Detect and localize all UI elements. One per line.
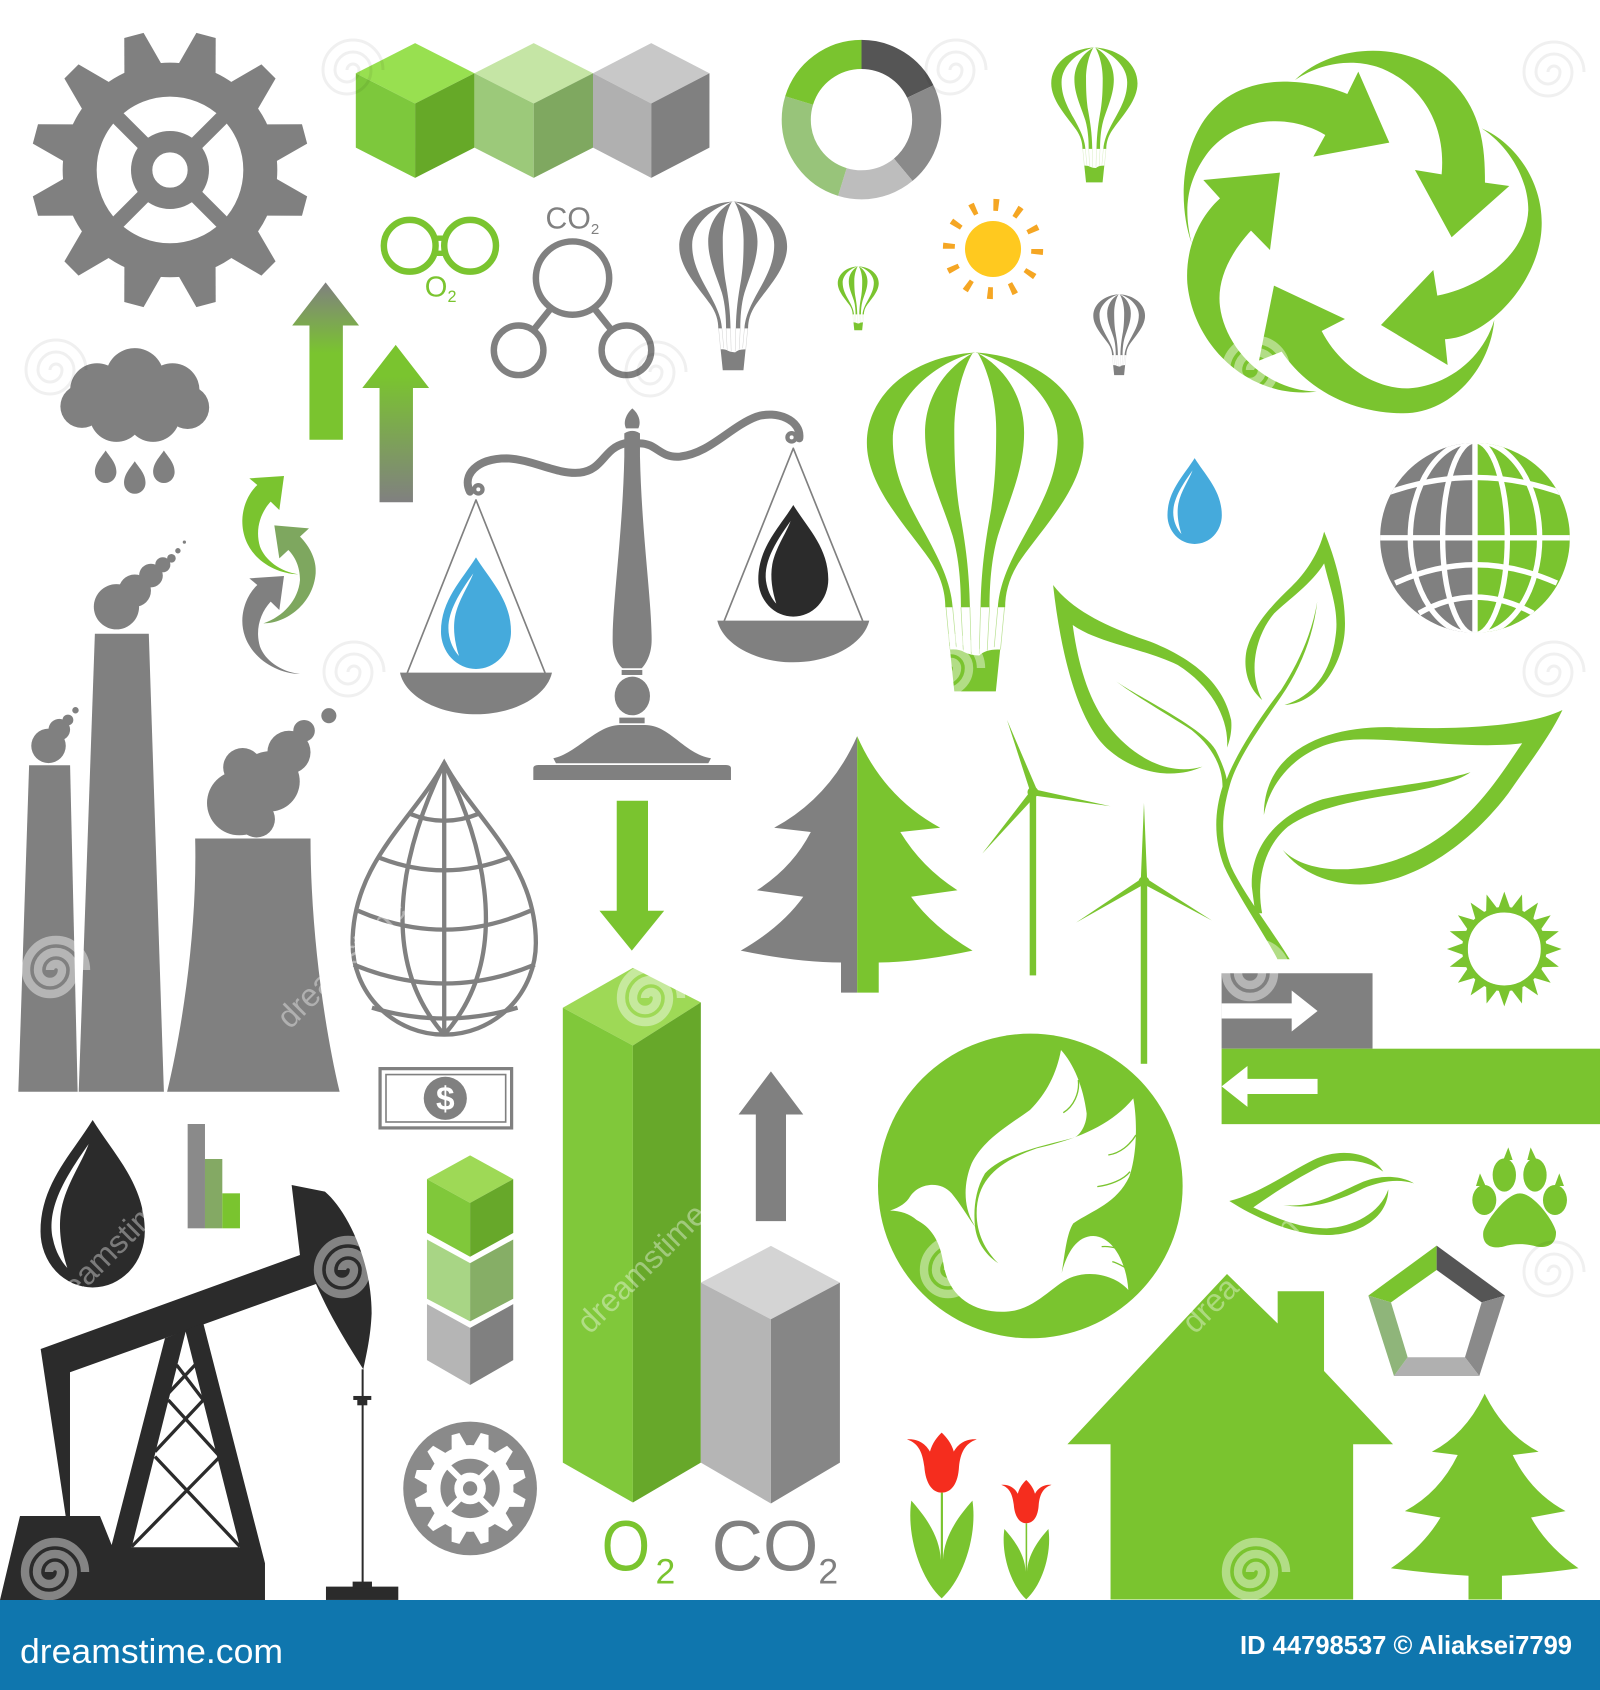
icon: CO2 molecule (494, 202, 651, 375)
icon: sun (949, 205, 1037, 293)
label: O2: 2 (656, 1551, 675, 1591)
icon: oxygen molecule (384, 220, 496, 306)
icon: oil pumpjack (0, 1185, 398, 1600)
icon: three isometric cubes (356, 43, 709, 178)
label: CO2: CO (712, 1507, 818, 1586)
watermark spirals and text: dreamstime (569, 1196, 713, 1340)
icon: CO2 molecule: CO (546, 202, 591, 235)
watermark spirals and text: dreamstime (269, 891, 413, 1035)
icon: balloon small green (838, 266, 879, 330)
icon: swirl arrows (242, 476, 316, 674)
icon: large gear (30, 30, 310, 310)
label: O2: O (602, 1507, 650, 1586)
icon: oxygen molecule: O (425, 271, 447, 303)
icon: balloon small gray (1093, 294, 1145, 375)
icon: dollar bill (380, 1069, 512, 1128)
chart: stacked isometric column (427, 1155, 513, 1385)
icon: half gray half green fir tree (741, 736, 973, 993)
icon: large red tulip (907, 1433, 977, 1598)
icon: blue water drop (1167, 458, 1222, 544)
icon: balance scale with water and oil (400, 408, 869, 780)
icon: plant with leaves (1053, 532, 1562, 959)
icon: dove in green circle (878, 1034, 1183, 1338)
icon: balloon top green (1051, 47, 1138, 182)
icon: blue water drop on scale (441, 557, 511, 669)
icon: oxygen molecule: 2 (447, 288, 456, 306)
icon: factory chimneys (18, 541, 340, 1092)
icon: balloon big green (867, 352, 1084, 691)
watermark spirals and text: dreamstime (34, 1181, 178, 1325)
icon: globe water drop (353, 763, 536, 1035)
panel: green sign with left arrow (1222, 1049, 1600, 1124)
chart: gray bar (701, 1246, 840, 1504)
arrow: green down arrow (599, 801, 664, 951)
icon: half gray half green globe (1375, 441, 1574, 635)
panel: gray sign with right arrow (1222, 973, 1373, 1049)
watermark spirals and text: dreamstime (1174, 1196, 1318, 1340)
chart: pentagon ring (1368, 1246, 1505, 1376)
arrow: gray up arrow (739, 1071, 803, 1221)
icon: green house (1067, 1274, 1393, 1599)
chart: segmented donut (796, 54, 927, 185)
icon: wind turbine right (1076, 803, 1212, 1064)
icon: recycling arrows (1184, 51, 1542, 413)
icon: balloon medium gray (679, 202, 787, 370)
icon: spiky green sun ring (1447, 892, 1562, 1006)
label: CO2: 2 (818, 1551, 838, 1591)
icon: paw print (1472, 1147, 1567, 1247)
icon: CO2 molecule: 2 (591, 221, 599, 238)
icon: rain cloud (60, 348, 209, 494)
arrow: up green to gray (362, 345, 429, 502)
icon: small red tulip (1001, 1480, 1052, 1599)
icon: small gear in circle (403, 1422, 537, 1555)
chart: tall green bar (563, 968, 701, 1502)
icon: wind turbine left (982, 720, 1111, 975)
icon: black oil drop on scale (758, 505, 828, 617)
icon: dollar bill: $ (436, 1081, 455, 1118)
icon: black oil drop (41, 1120, 145, 1287)
footer credit text: ID 44798537 © Aliaksei7799 (1240, 1630, 1572, 1660)
arrow: up gray to green (292, 282, 359, 440)
chart: small stepped bars (188, 1124, 240, 1228)
icon: small green fir tree (1391, 1394, 1578, 1599)
footer banner (0, 1600, 1600, 1690)
footer logo text: dreamstime.com (20, 1633, 283, 1671)
icon: small outline leaf (1229, 1153, 1414, 1235)
